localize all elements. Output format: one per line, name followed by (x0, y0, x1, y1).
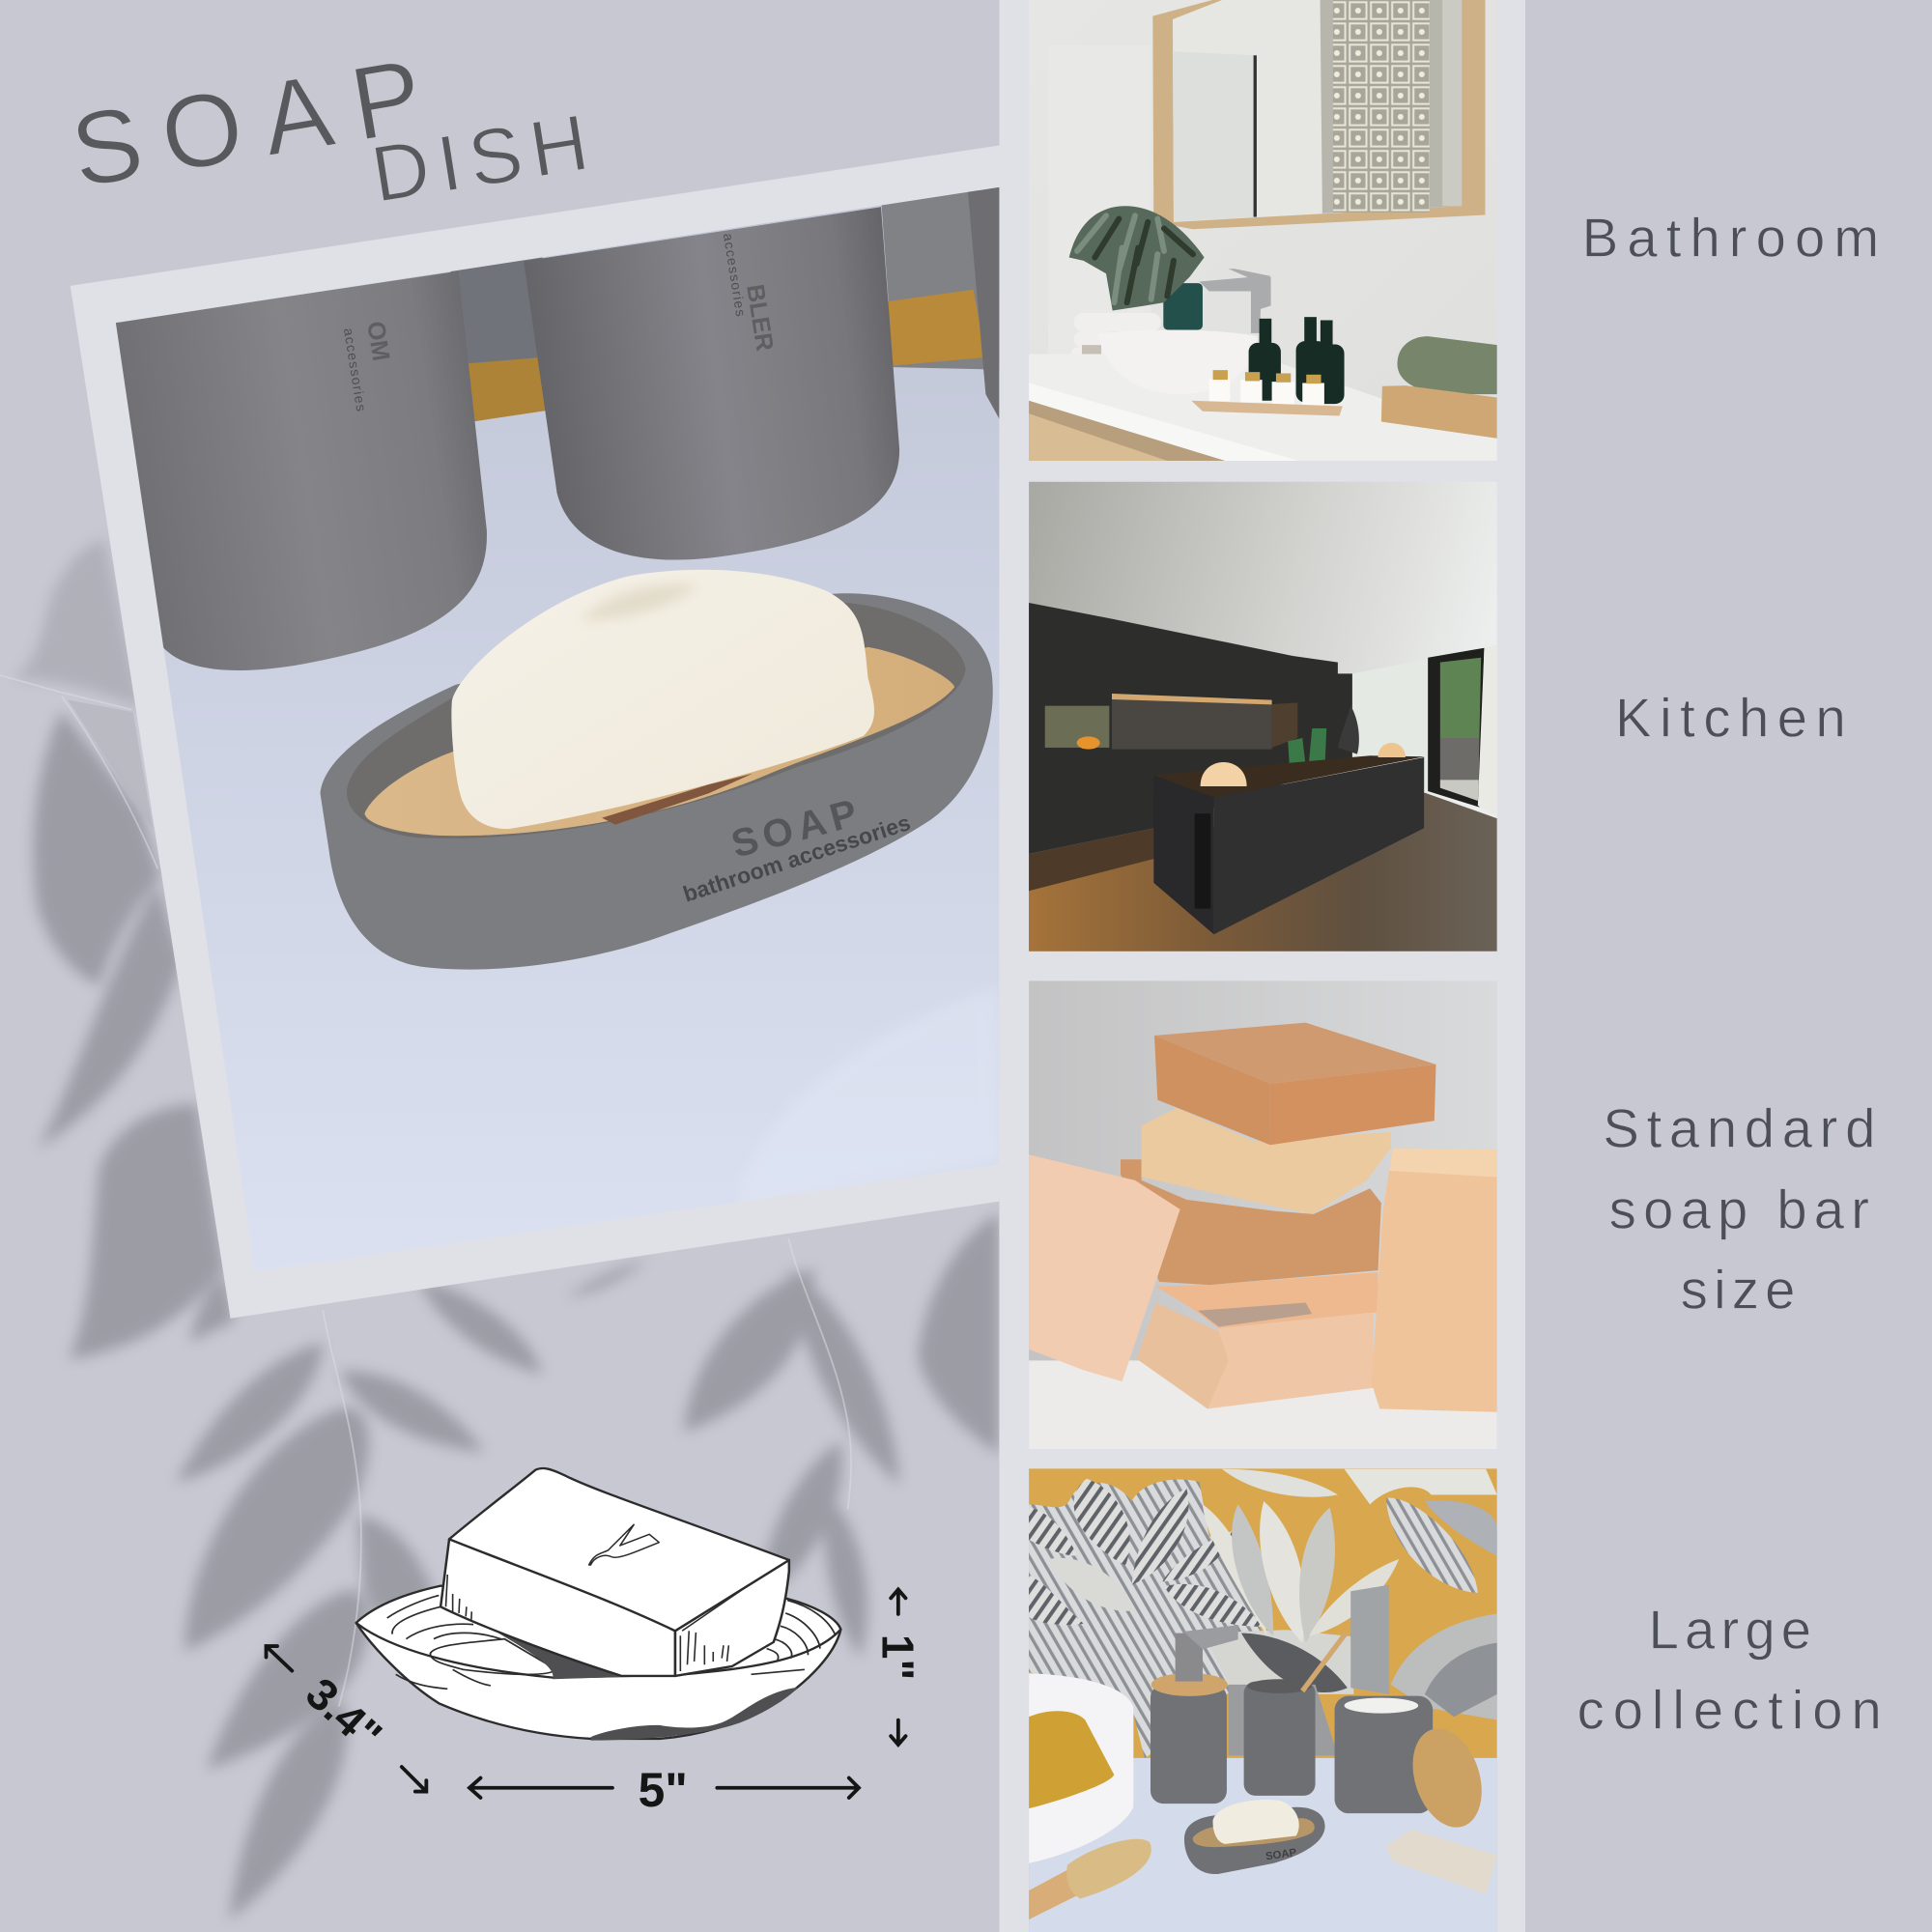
wooden tray (1137, 1272, 1378, 1408)
wooden insert (364, 647, 954, 836)
table surface (1029, 1758, 1497, 1932)
photo: bathroom (1029, 0, 1497, 469)
centre strip panel (999, 0, 1525, 1932)
basin (1101, 330, 1258, 354)
cylinder left: OM (361, 320, 394, 363)
cream soap middle (1142, 1108, 1391, 1214)
label: Standard soap bar size: size (1681, 1260, 1795, 1321)
soap bar (451, 570, 874, 829)
towel on wooden block (1381, 336, 1497, 439)
cylinder right: accessories (721, 232, 749, 319)
soft reflections on the table (739, 985, 999, 1213)
brown soap lower (1121, 1159, 1381, 1285)
pumice stone (1386, 1830, 1497, 1893)
dimension: width 5 inches (469, 1763, 859, 1817)
cylinder left: accessories (341, 327, 369, 413)
bottles (1249, 317, 1345, 404)
soap bar (440, 1468, 789, 1676)
dimension: width 5 inches: 5" (639, 1763, 688, 1817)
leaning soap left (1029, 1154, 1180, 1381)
oven screen (1045, 706, 1109, 750)
jar and lid (1335, 1696, 1493, 1836)
right labels (1577, 207, 1882, 1741)
label: Large collection: Large (1649, 1600, 1811, 1661)
main photo frame (71, 146, 999, 1319)
basin and yellow towel (1029, 1673, 1133, 1863)
towels stack (1082, 313, 1161, 354)
upright soap right (1372, 1149, 1497, 1412)
cylinder right (524, 207, 899, 560)
cylinder left (111, 271, 487, 670)
floor (1029, 793, 1497, 957)
dish dimensions illustration (267, 1468, 923, 1817)
label: Standard soap bar size (1603, 1097, 1875, 1321)
label: Large collection (1577, 1600, 1882, 1741)
mini soap dish (1184, 1800, 1325, 1874)
embossed lettering: SOAP (726, 790, 862, 867)
crisp pale leaf fold (68, 699, 153, 828)
tropical wallpaper leaves (1029, 1469, 1497, 1759)
tumbler with toothbrush (1244, 1634, 1346, 1796)
photo: soap bars (1029, 980, 1497, 1451)
main product photo: soap dish (111, 185, 1005, 1282)
brush (1029, 1839, 1151, 1919)
soap dish: bathroom accessories (680, 810, 914, 907)
glowing lamps (1201, 762, 1247, 786)
orange soap top (1154, 1023, 1436, 1145)
soap dish (321, 570, 993, 970)
cabinets (1029, 603, 1352, 854)
label: Bathroom: Bathroom (1582, 207, 1879, 268)
background pale stems (0, 675, 851, 1707)
label: Large collection: collection (1577, 1680, 1882, 1741)
dimension: height 1 inch (872, 1589, 923, 1745)
backdrop cloth and wood (450, 185, 999, 421)
island (1153, 755, 1425, 934)
tap (1200, 269, 1271, 333)
mini soap dish: SOAP (1264, 1847, 1297, 1862)
dimension: depth 3.4 inches: 3.4" (297, 1667, 391, 1760)
photo: kitchen (1029, 480, 1497, 957)
cylinder right: BLER (741, 282, 779, 353)
title (64, 37, 594, 219)
title word: SOAP: SOAP (64, 37, 430, 210)
label: Standard soap bar size: Standard (1603, 1097, 1875, 1158)
background leaf shadows (13, 540, 999, 1919)
curtains and window (1352, 644, 1497, 817)
photo: large collection (1029, 1463, 1497, 1932)
mirror (1152, 0, 1485, 229)
dimension: height 1 inch: 1" (872, 1634, 923, 1680)
plate (356, 1586, 840, 1741)
backsplash with light (1112, 694, 1297, 750)
cactus decor and tap (1288, 706, 1359, 767)
counter (1029, 354, 1497, 462)
small jars (1191, 370, 1343, 415)
dimension: depth 3.4 inches (267, 1646, 426, 1792)
plant and vase (1069, 206, 1205, 329)
label: Standard soap bar size: soap bar (1609, 1179, 1869, 1240)
label: Kitchen: Kitchen (1615, 688, 1846, 749)
title word: DISH: DISH (366, 99, 594, 219)
pump dispenser (1151, 1625, 1238, 1804)
plate and soap drawing (356, 1468, 840, 1741)
